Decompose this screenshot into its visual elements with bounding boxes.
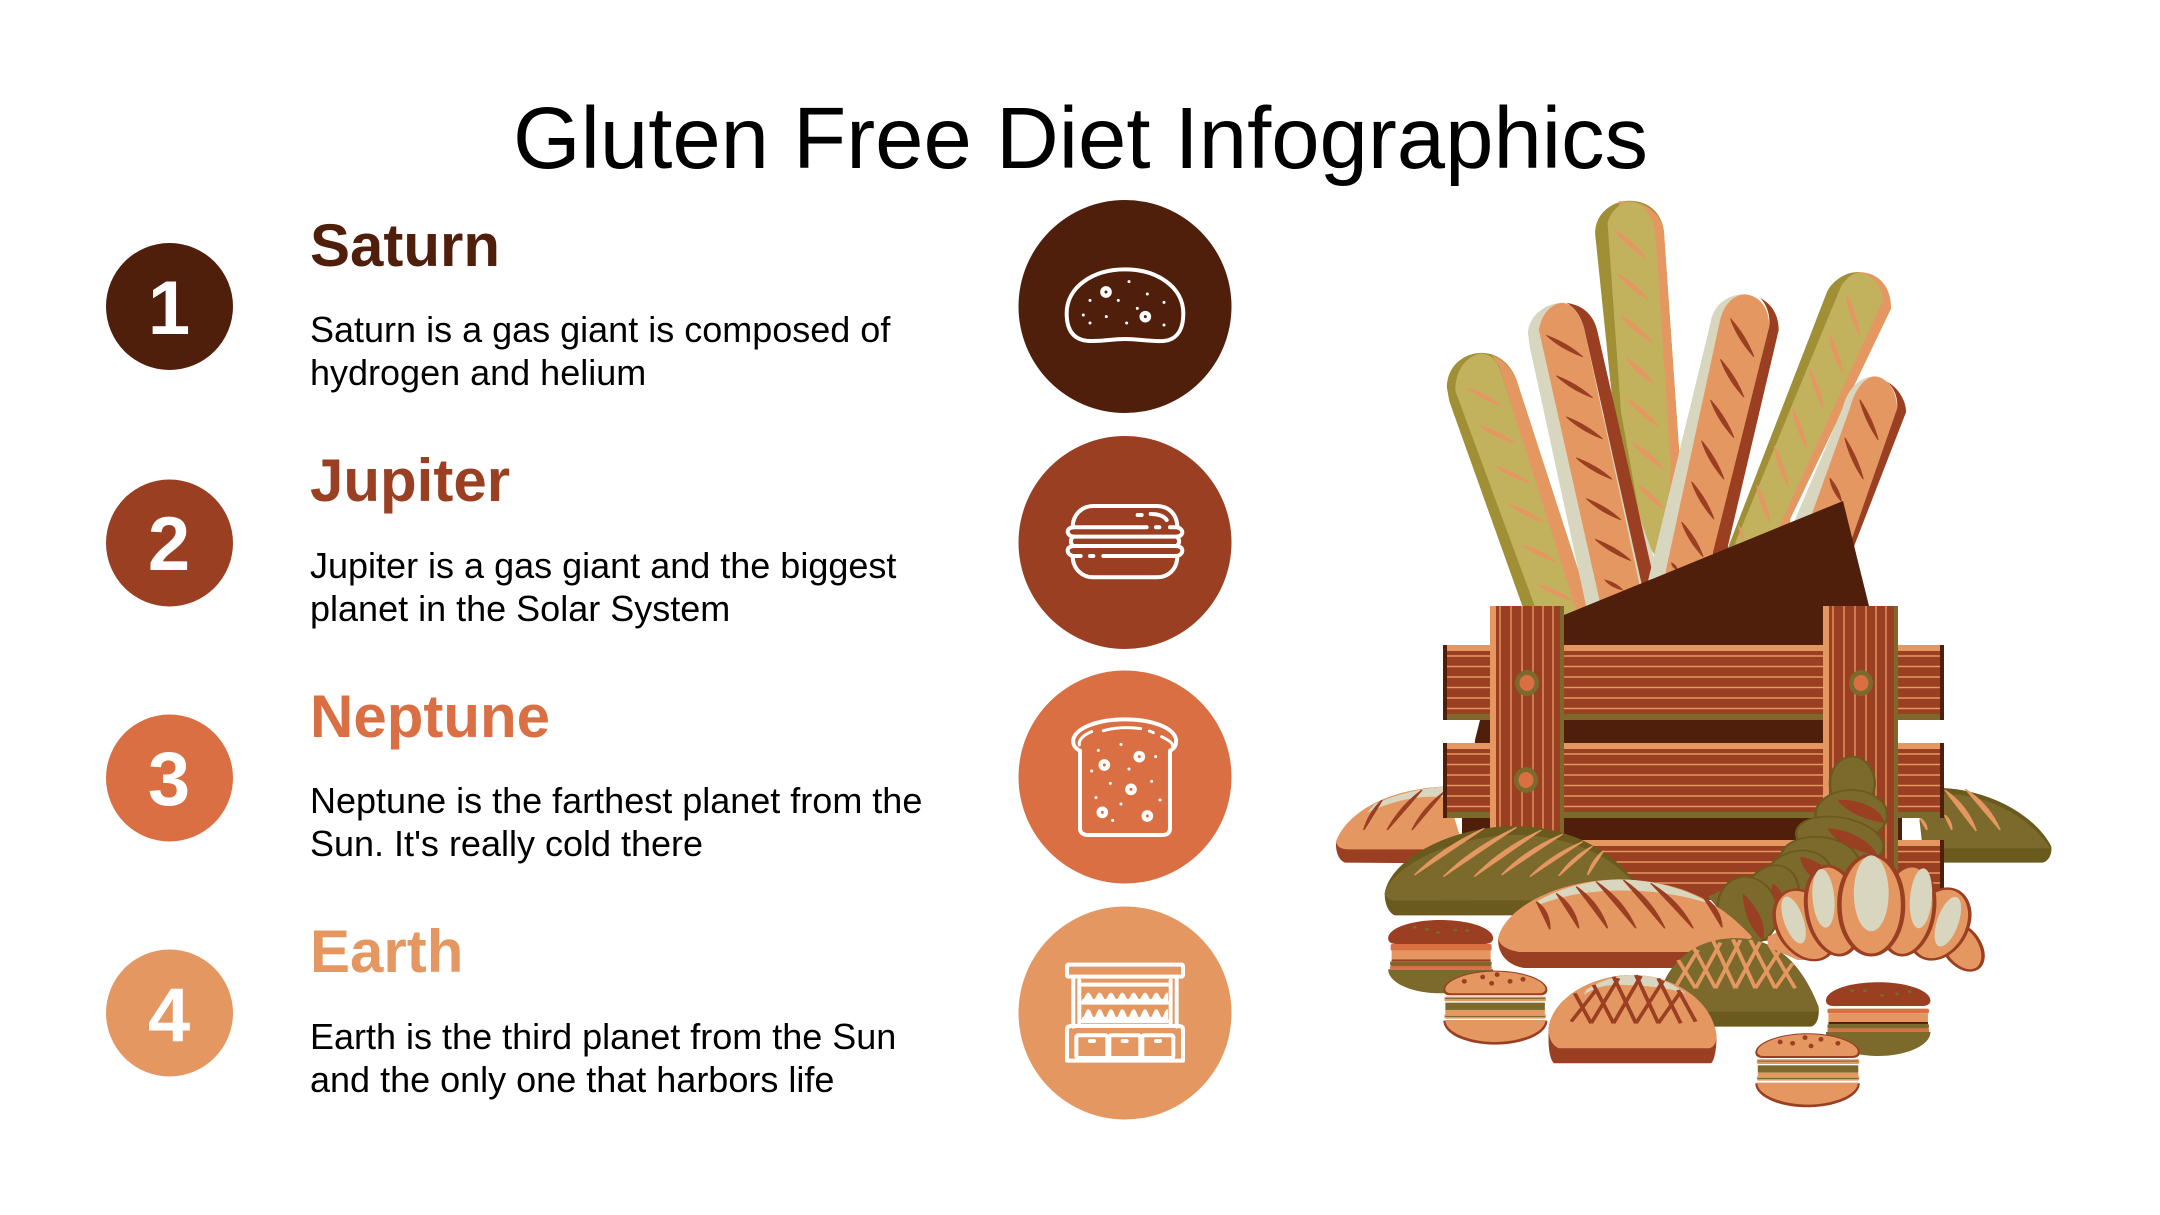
item 4: Earth	[106, 918, 896, 1100]
description: Earth: and the only one that harbors life	[310, 1059, 834, 1100]
loaf: centre orange	[1498, 879, 1752, 968]
number badge 2	[106, 480, 233, 606]
baguette: tall centre	[1595, 201, 1681, 573]
baguette: far left	[1447, 353, 1594, 617]
front loaves and pastries	[1385, 757, 1991, 1107]
crate slat 3	[1580, 840, 1944, 900]
icon circle: burger bun	[1018, 436, 1232, 649]
icon circle: sliced bread	[1018, 670, 1232, 884]
burger: right	[1826, 982, 1930, 1056]
icon circle: bakery display	[1018, 906, 1232, 1120]
loaf: orange lattice	[1549, 975, 1717, 1063]
baguette: far right gold	[1728, 272, 1891, 573]
loaf: back right	[1919, 788, 2051, 863]
dark gap under slat 2	[1462, 818, 1902, 840]
description: Neptune: Sun. It's really cold there	[310, 823, 703, 864]
burger: bottom	[1755, 1033, 1860, 1107]
number badge 3	[106, 714, 233, 842]
dark crate back panel	[1470, 501, 1900, 840]
icon circle: bread loaf	[1018, 200, 1232, 413]
loaf: large olive	[1385, 826, 1638, 915]
title: Gluten Free Diet Infographics	[513, 90, 1648, 187]
crate post: right	[1823, 606, 1898, 876]
item 2: Jupiter	[106, 447, 896, 629]
number badge 4: 4	[148, 973, 190, 1058]
crate post: left	[1490, 606, 1564, 842]
heading: Saturn: Saturn	[310, 212, 500, 279]
baguette: short right	[1795, 376, 1906, 566]
heading: Neptune: Neptune	[310, 683, 550, 750]
crate slat 1	[1443, 645, 1944, 720]
description: Neptune: Neptune is the farthest planet from the	[310, 780, 922, 821]
heading: Earth: Earth	[310, 918, 463, 985]
description: Saturn: hydrogen and helium	[310, 352, 646, 393]
number badge 1: 1	[148, 266, 190, 351]
baguette: right centre	[1648, 294, 1779, 609]
loaf: olive lattice	[1663, 938, 1819, 1027]
description: Saturn: Saturn is a gas giant is composed of	[310, 309, 890, 350]
croissant: front	[1764, 855, 1991, 974]
loaf: back left	[1336, 787, 1464, 863]
crate slat 2	[1443, 743, 1944, 818]
item 3: Neptune	[106, 683, 922, 864]
baguette: left centre	[1528, 303, 1658, 617]
burger: lower left	[1443, 971, 1547, 1045]
number badge 3: 3	[148, 737, 190, 822]
illustration: bread crate	[1336, 201, 2051, 1107]
item 1: Saturn	[106, 212, 891, 393]
number badge 4	[106, 950, 233, 1076]
number badge 1	[106, 243, 233, 370]
description: Jupiter: planet in the Solar System	[310, 588, 730, 629]
baguettes	[1447, 201, 1906, 617]
description: Jupiter: Jupiter is a gas giant and the biggest	[310, 545, 896, 586]
number badge 2: 2	[148, 502, 190, 587]
croissant: back olive	[1708, 757, 1895, 945]
burger: top left	[1388, 920, 1493, 993]
back loaves behind crate	[1336, 787, 2051, 863]
heading: Jupiter: Jupiter	[310, 447, 510, 514]
description: Earth: Earth is the third planet from the Sun	[310, 1016, 896, 1057]
